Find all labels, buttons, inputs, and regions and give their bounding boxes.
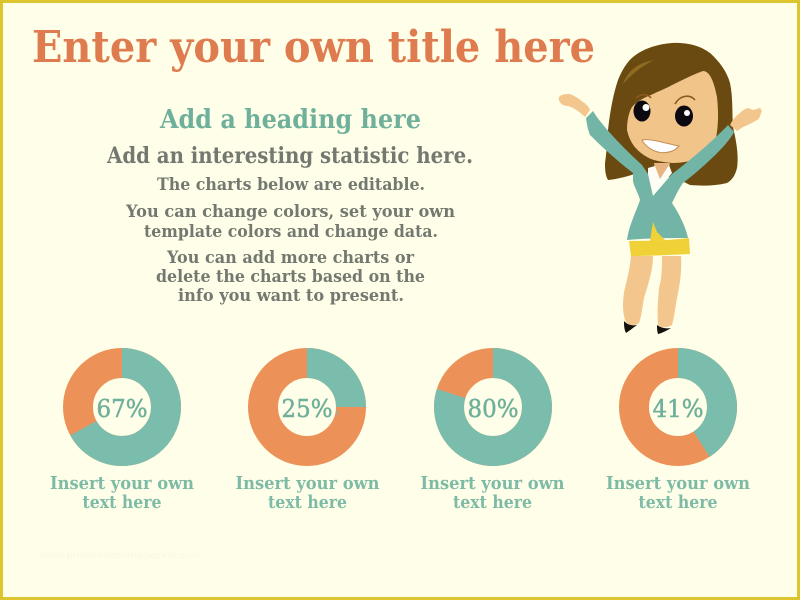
label: chart 1 — [50, 473, 194, 513]
hair highlight — [623, 60, 654, 84]
body text: info you want to present. — [178, 286, 404, 306]
neck — [654, 163, 670, 179]
statistic line: Add an interesting statistic here. — [106, 143, 473, 169]
label: chart 2: Insert your own — [236, 473, 380, 494]
body text: The charts below are editable. — [157, 175, 425, 195]
label: chart 4: text here — [638, 492, 718, 513]
shoes — [624, 321, 671, 334]
jacket with sleeves — [586, 111, 734, 240]
donut chart: 25%: 25% — [282, 395, 332, 423]
shirt — [648, 165, 672, 196]
label: chart 1: text here — [82, 492, 162, 513]
jacket front flap — [650, 222, 665, 241]
label: chart 4 — [606, 473, 750, 513]
mouth — [642, 140, 679, 153]
eyebrows — [636, 95, 695, 104]
title: Enter your own title here — [32, 22, 595, 73]
body text: You can add more charts or — [166, 248, 415, 268]
heading: Add a heading here — [159, 105, 421, 135]
label: chart 1: Insert your own — [50, 473, 194, 494]
body text: You can change colors, set your own — [125, 202, 455, 222]
donut chart: 67%: 67% — [96, 395, 148, 423]
face — [627, 71, 718, 163]
label: chart 2: text here — [268, 492, 347, 513]
body text — [125, 175, 455, 306]
right hand — [730, 108, 762, 131]
body text: delete the charts based on the — [156, 267, 425, 287]
eyes — [634, 100, 693, 126]
faint watermark: www.presentationmagazine.com — [39, 550, 200, 560]
donut chart: 25% — [263, 363, 351, 451]
left hand — [559, 94, 590, 117]
donut chart: 41%: 41% — [652, 395, 704, 423]
label: chart 3 — [420, 473, 564, 513]
label: chart 2 — [236, 473, 380, 513]
character illustration — [559, 43, 762, 334]
donut chart: 80%: 80% — [468, 395, 518, 423]
donut chart: 80% — [449, 363, 537, 451]
body text: template colors and change data. — [144, 222, 438, 242]
label: chart 3: Insert your own — [420, 473, 564, 494]
donut chart: 41% — [634, 363, 722, 451]
legs — [623, 256, 681, 327]
skirt — [629, 238, 690, 256]
label: chart 4: Insert your own — [606, 473, 750, 494]
hair — [605, 43, 738, 186]
label: chart 3: text here — [453, 492, 532, 513]
donut chart: 67% — [78, 363, 166, 451]
